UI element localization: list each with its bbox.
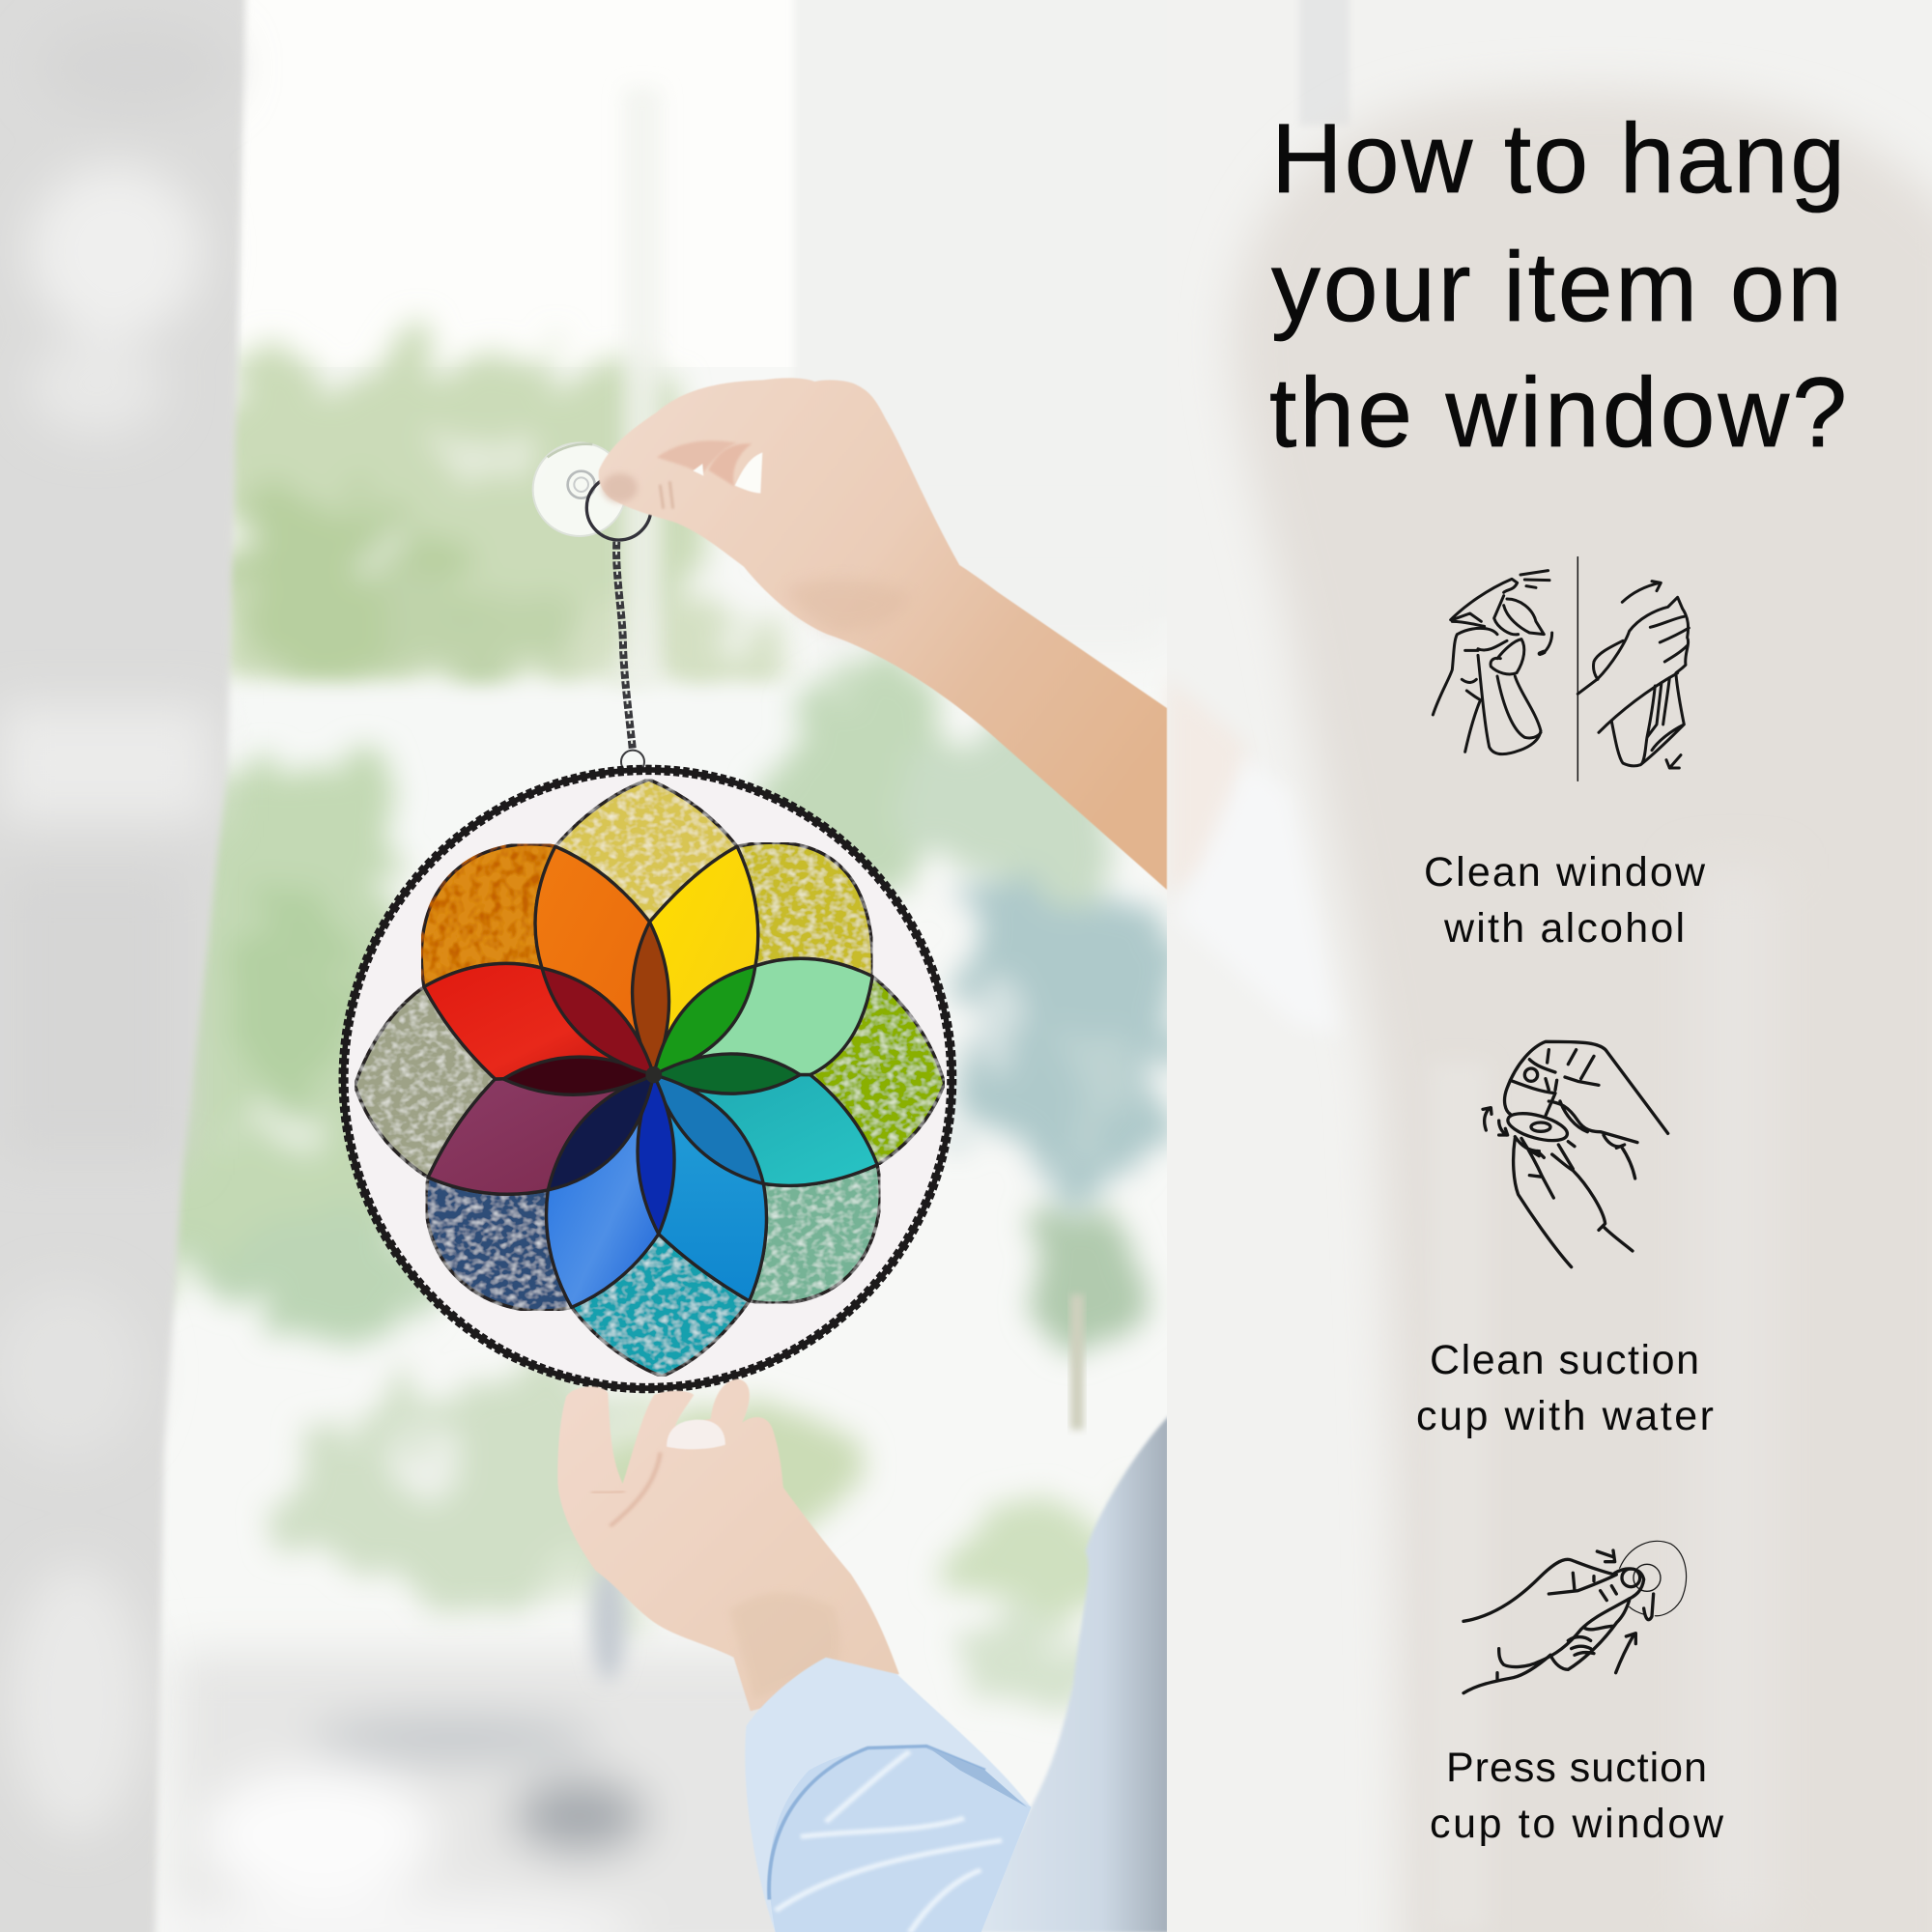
petal: turquoise: [654, 1075, 877, 1185]
lens: green: [654, 966, 755, 1075]
thumb creases: [660, 481, 673, 509]
petal: purple: [428, 1075, 654, 1194]
petal: yellow green: [737, 842, 872, 977]
lower hand: [557, 1379, 899, 1711]
petal: red: [424, 963, 654, 1079]
title: your item on: [1271, 232, 1842, 342]
petal: amber: [421, 844, 555, 987]
rope frame: [344, 770, 952, 1388]
white band: [203, 686, 821, 850]
petal: pale yellow: [555, 780, 737, 922]
lens: dark red: [542, 968, 654, 1075]
thumb tip: [602, 473, 638, 502]
window sky: [242, 0, 802, 367]
petal: teal: [572, 1234, 750, 1377]
suction cup: [533, 442, 626, 536]
petal: orange: [535, 846, 654, 1075]
petal: blue: [547, 1075, 659, 1307]
right info panel: [1167, 0, 1932, 1932]
panel photo: window reflection strip: [1299, 0, 1350, 126]
petal: sky blue: [654, 1075, 766, 1301]
icon: cleaning suction cup: [1483, 1041, 1668, 1267]
lens: cobalt: [638, 1075, 674, 1234]
palm crease: [611, 1452, 661, 1526]
caption: clean suction cup: [1416, 1337, 1714, 1439]
caption: clean window: Clean window: [1424, 849, 1706, 895]
curtain: [0, 0, 246, 1932]
stained glass sun catcher: [343, 769, 952, 1389]
petal: pale aqua: [750, 1165, 880, 1303]
petal: yellow: [650, 846, 758, 1075]
shirt sleeve cuff: [745, 1658, 1031, 1932]
title: the window?: [1269, 357, 1847, 468]
centre lenses: [503, 922, 800, 1234]
bottom street: [135, 1652, 831, 1932]
icon: spray bottle and cloth: [1433, 557, 1689, 781]
title: How to hang: [1271, 103, 1845, 213]
outer petals: [355, 780, 945, 1377]
foliage: lower left: [130, 773, 865, 1613]
caption: press suction cup: cup to window: [1430, 1801, 1724, 1847]
thumb nail: [667, 1420, 725, 1449]
lens: dark green: [654, 1054, 800, 1094]
petal: mint: [654, 958, 872, 1075]
lens: maroon: [503, 1057, 654, 1094]
lens: ocean blue: [654, 1075, 763, 1183]
caption: press suction cup: Press suction: [1446, 1745, 1707, 1791]
panel photo: faint arm: [1167, 676, 1246, 894]
white glass disc: [343, 769, 952, 1389]
caption: clean window: [1424, 849, 1706, 952]
panel photo: woman's hair: [1232, 91, 1932, 1932]
finger shading: [657, 440, 737, 474]
panel photo: collar: [1177, 758, 1338, 1034]
trunk: [1070, 1294, 1084, 1430]
gap between fingers: [693, 452, 762, 494]
lens: brown: [633, 922, 669, 1075]
inner petals: [424, 846, 877, 1307]
title: [1269, 103, 1847, 468]
caption: clean suction cup: Clean suction: [1430, 1337, 1699, 1383]
petal: lime: [810, 977, 945, 1165]
caption: press suction cup: [1430, 1745, 1724, 1847]
foliage: upper trees: [217, 362, 807, 700]
upper hand and forearm: [599, 378, 1167, 890]
palm shadow: [785, 580, 911, 632]
woman's shoulder and back sleeve: [977, 1415, 1170, 1932]
icon: pressing suction cup: [1463, 1541, 1687, 1693]
petal: steel blue: [426, 1178, 572, 1311]
lens: navy: [548, 1075, 654, 1190]
caption: clean suction cup: cup with water: [1416, 1393, 1714, 1439]
hanging ring and chain: [586, 475, 651, 774]
caption: clean window: with alcohol: [1443, 905, 1685, 952]
wall right of window: [794, 0, 1180, 618]
foliage: right: [768, 676, 1183, 1719]
petal: clear grey: [355, 987, 496, 1178]
solder hub: [645, 1066, 662, 1083]
mullion: [623, 87, 662, 686]
